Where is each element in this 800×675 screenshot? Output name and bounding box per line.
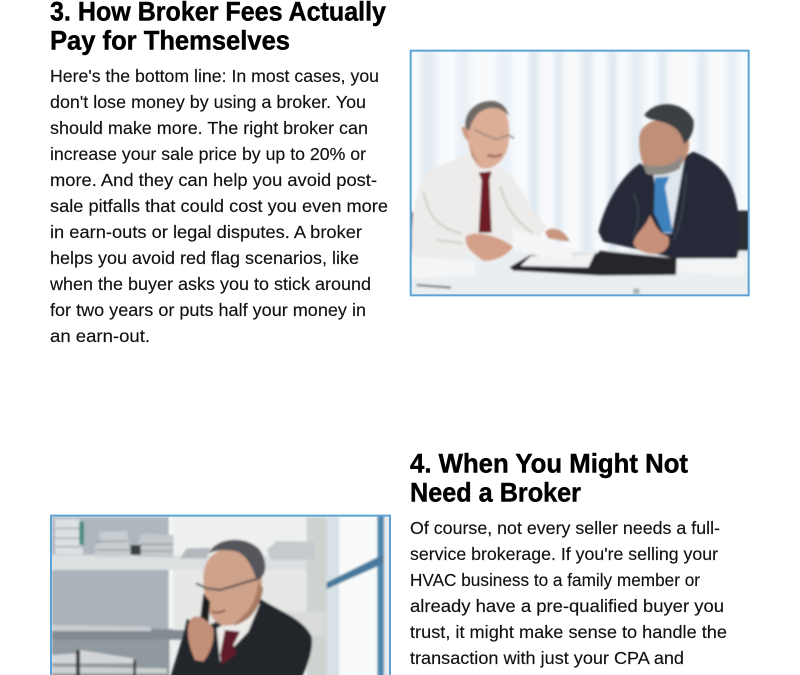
shelves xyxy=(52,517,169,557)
heading: section 4: 4. When You Might Not xyxy=(410,448,688,478)
left man hand xyxy=(466,234,513,261)
hand xyxy=(188,617,214,662)
text block: section 3 body: Here's the bottom line: In most cases, you xyxy=(50,66,379,86)
heading: section 3 xyxy=(50,0,386,56)
text block: section 3 body xyxy=(49,66,388,346)
text block: section 4 body: Of course, not every seller needs a full- xyxy=(410,518,720,538)
stacks of folders xyxy=(55,519,83,554)
text block: section 4 body: already have a pre-qualified buyer you xyxy=(410,596,724,616)
text block: section 3 body: an earn-out. xyxy=(50,326,150,346)
text block: section 3 body: helps you avoid red flag scenarios, like xyxy=(50,248,359,268)
text block: section 3 body: in earn-outs or legal disputes. A broker xyxy=(50,222,362,242)
right man tie xyxy=(654,177,673,233)
table xyxy=(410,251,749,297)
left man head xyxy=(466,105,509,169)
head xyxy=(203,548,262,626)
window xyxy=(327,517,340,675)
right man hands xyxy=(633,215,669,254)
text block: section 4 body: HVAC business to a family member or xyxy=(410,570,700,590)
text block: section 3 body: for two years or puts half your money in xyxy=(50,300,366,320)
image border xyxy=(51,516,390,675)
shirt and tie xyxy=(217,603,260,662)
chair xyxy=(736,208,748,252)
text block: section 3 body: increase your sale price by up to 20% or xyxy=(50,144,366,164)
heading: section 3: Pay for Themselves xyxy=(50,26,290,56)
glasses xyxy=(196,579,257,590)
text block: section 3 body: should make more. The right broker can xyxy=(50,118,368,138)
right man head xyxy=(639,120,689,174)
text block: section 3 body: don't lose money by using a broker. You xyxy=(50,92,366,112)
suit xyxy=(168,598,312,675)
text block: section 3 body: when the buyer asks you to stick around xyxy=(49,274,371,294)
folder xyxy=(509,251,677,276)
glasses xyxy=(474,129,514,139)
heading: section 4 xyxy=(410,448,688,508)
hair xyxy=(208,540,265,581)
text block: section 4 body: trust, it might make sense to handle the xyxy=(410,622,727,642)
text block: section 4 body: service brokerage. If you're selling your xyxy=(410,544,718,564)
image border xyxy=(411,51,749,295)
photo: two businessmen reviewing documents xyxy=(409,50,750,297)
left man tie xyxy=(479,171,492,233)
photo: businessman on the phone xyxy=(50,515,391,675)
papers xyxy=(512,230,573,257)
text block: section 4 body: transaction with just your CPA and xyxy=(410,648,684,668)
heading: section 4: Need a Broker xyxy=(410,478,581,508)
left man shirt xyxy=(411,153,547,257)
phone xyxy=(200,593,210,628)
text block: section 4 body xyxy=(410,518,727,668)
right man suit xyxy=(598,152,739,258)
text block: section 3 body: sale pitfalls that could cost you even more xyxy=(50,196,388,216)
text block: section 3 body: more. And they can help you avoid post- xyxy=(50,170,377,190)
